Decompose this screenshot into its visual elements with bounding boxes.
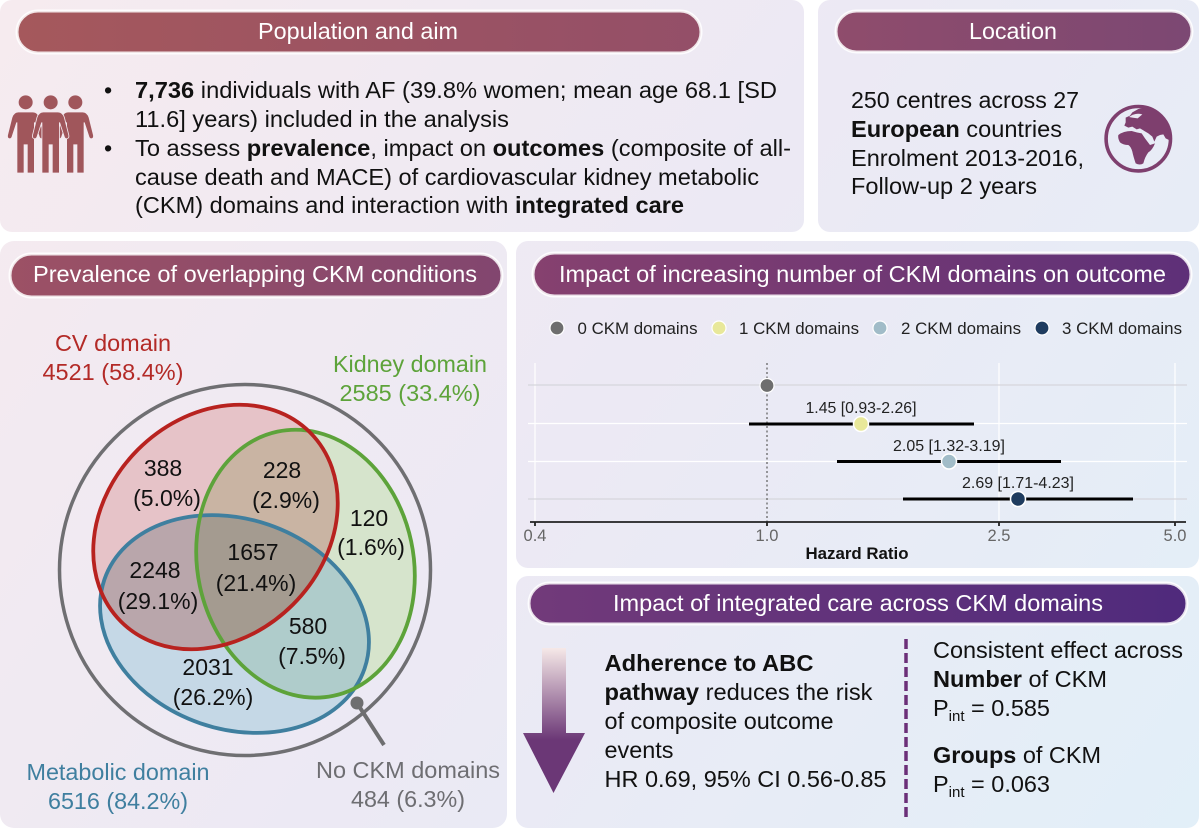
legend: 3 CKM domains [1062, 319, 1182, 338]
text: consistent effect: P [933, 771, 949, 797]
heading: population and aim: Population and aim [258, 18, 458, 44]
venn counts: (26.2%) [173, 684, 253, 710]
icon: globe [1106, 106, 1171, 171]
venn counts: 2248 [129, 557, 181, 583]
callout: no CKM domains: 484 (6.3%) [351, 786, 465, 812]
text: ABC pathway: of composite outcome [604, 708, 834, 734]
text: population and aim bullets: • [104, 77, 112, 103]
venn counts: (7.5%) [278, 643, 346, 669]
text: population and aim bullets [104, 77, 791, 218]
axis: 5.0 [1164, 527, 1186, 545]
heading: integrated care: Impact of integrated care across CKM domains [613, 590, 1103, 616]
axis: Hazard Ratio [806, 544, 908, 563]
legend: 1 CKM domains [739, 319, 859, 338]
text: population and aim bullets: 7,736 individuals with AF (39.8% women; mean age 68.1 [SD [135, 77, 777, 103]
text: location details: European countries [851, 116, 1062, 142]
panel: population and aim [0, 0, 804, 232]
legend: 2 CKM domains [901, 319, 1021, 338]
venn counts: (1.6%) [337, 534, 405, 560]
panel: impact of increasing number of CKM domains [516, 241, 1199, 568]
venn counts: (2.9%) [252, 487, 320, 513]
label: kidney domain: 2585 (33.4%) [340, 380, 480, 406]
label: metabolic domain [26, 759, 210, 814]
venn counts: 1657 [227, 539, 279, 565]
heading: impact of number of domains [533, 253, 1191, 296]
heading: prevalence: Prevalence of overlapping CKM conditions [33, 261, 477, 287]
arrow: risk reduction [523, 648, 585, 793]
label: CV domain: CV domain [55, 330, 171, 356]
venn counts [118, 455, 405, 710]
heading: prevalence [10, 254, 502, 297]
axis: 0.4 [524, 527, 546, 545]
text: population and aim bullets: • [104, 135, 112, 161]
point: 0 domains [760, 378, 774, 392]
text: ABC pathway: events [604, 737, 674, 763]
heading: integrated care [529, 583, 1187, 624]
text: population and aim bullets: (CKM) domains and interaction with integrated care [135, 192, 684, 218]
heading: population and aim [17, 11, 701, 53]
heading: impact of number of domains: Impact of increasing number of CKM domains on outcome [559, 261, 1166, 287]
point: 1 domain [749, 400, 974, 432]
text: consistent effect [933, 637, 1183, 801]
callout: no CKM domains: No CKM domains [316, 757, 500, 783]
label: kidney domain [333, 351, 487, 406]
text: location details: Follow-up 2 years [851, 173, 1037, 199]
panel: location [818, 0, 1199, 232]
label: metabolic domain: Metabolic domain [26, 759, 210, 785]
panel: prevalence of overlapping CKM conditions [0, 241, 507, 828]
venn counts: 228 [263, 457, 301, 483]
label: CV domain [42, 330, 184, 385]
text: consistent effect: Number of CKM [933, 666, 1107, 692]
label: CV domain: 4521 (58.4%) [42, 359, 184, 385]
text: consistent effect: = 0.585 [965, 695, 1050, 721]
axis: 2.5 [988, 527, 1010, 545]
point: 2 domains [837, 438, 1061, 469]
venn counts: (21.4%) [216, 570, 296, 596]
point: 3 domains [903, 475, 1133, 506]
heading: location: Location [969, 18, 1057, 44]
text: consistent effect: int [949, 784, 965, 801]
point: 1 domain: 1.45 [0.93-2.26] [806, 400, 916, 417]
venn counts: 388 [144, 455, 182, 481]
text: ABC pathway: Adherence to ABC [604, 650, 814, 676]
label: metabolic domain: 6516 (84.2%) [48, 788, 188, 814]
callout: no CKM domains [316, 696, 500, 812]
axis [524, 522, 1186, 563]
panel: impact of integrated care [516, 576, 1199, 828]
text: population and aim bullets: To assess prevalence, impact on outcomes (composite of all- [135, 135, 791, 161]
point: 2 domains: 2.05 [1.32-3.19] [893, 438, 1005, 455]
text: location details [851, 87, 1084, 199]
venn counts: 2031 [182, 654, 234, 680]
text: consistent effect: int [949, 708, 965, 725]
axis: 1.0 [756, 527, 778, 545]
venn counts: (29.1%) [118, 588, 198, 614]
text: consistent effect: Consistent effect across [933, 637, 1183, 663]
text: population and aim bullets: cause death and MACE) of cardiovascular kidney metabolic [135, 164, 759, 190]
text: ABC pathway: HR 0.69, 95% CI 0.56-0.85 [604, 766, 886, 792]
text: location details: 250 centres across 27 [851, 87, 1079, 113]
label: kidney domain: Kidney domain [333, 351, 487, 377]
text: ABC pathway: pathway reduces the risk [604, 679, 873, 705]
text: location details: Enrolment 2013-2016, [851, 145, 1084, 171]
venn counts: 120 [350, 505, 388, 531]
point: 3 domains: 2.69 [1.71-4.23] [962, 475, 1074, 492]
icon: three people [8, 95, 93, 173]
venn diagram [58, 382, 432, 758]
venn counts: 580 [289, 613, 327, 639]
text: ABC pathway [604, 650, 886, 792]
text: consistent effect: Groups of CKM [933, 742, 1101, 768]
legend: 0 CKM domains [578, 319, 698, 338]
venn counts: (5.0%) [133, 485, 201, 511]
heading: location [836, 11, 1192, 52]
text: consistent effect: P [933, 695, 949, 721]
text: consistent effect: = 0.063 [965, 771, 1050, 797]
text: population and aim bullets: 11.6] years) included in the analysis [135, 106, 509, 132]
forest plot [524, 363, 1187, 563]
legend [550, 319, 1182, 338]
